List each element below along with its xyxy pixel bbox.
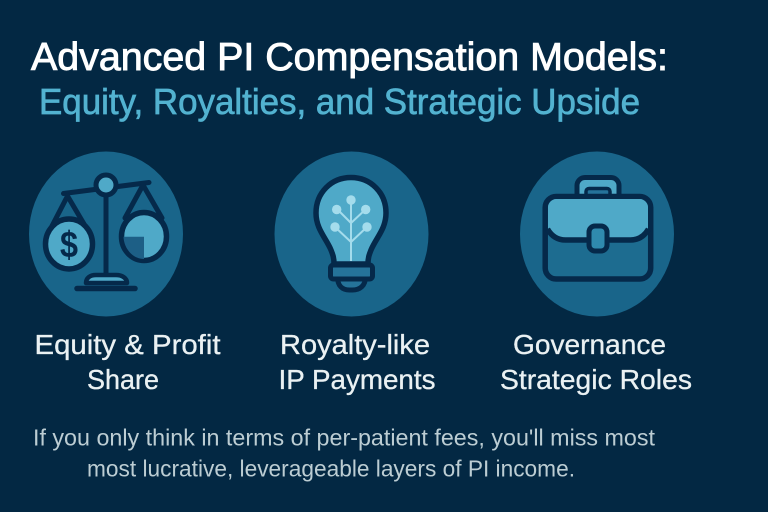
label: equity and profit share: Share [87, 364, 159, 395]
icon: briefcase [520, 152, 674, 316]
label: equity and profit share [34, 329, 221, 395]
icon: balance scale with dollar coin and pie chart: $ [60, 224, 78, 265]
icon: balance scale with dollar coin and pie chart [29, 152, 183, 316]
title: Advanced PI Compensation Models: [31, 36, 668, 79]
closing note: If you only think in terms of per-patient fees, you'll miss most [33, 424, 655, 450]
label: governance strategic roles: Strategic Roles [500, 364, 692, 395]
title [31, 36, 668, 122]
label: equity and profit share: Equity & Profit [34, 329, 221, 360]
label: royalty-like IP payments: IP Payments [278, 364, 436, 395]
icon: light bulb with circuit tree [274, 152, 428, 316]
label: governance strategic roles [500, 329, 692, 395]
label: governance strategic roles: Governance [513, 329, 666, 360]
closing note [33, 424, 655, 482]
label: royalty-like IP payments: Royalty-like [280, 329, 430, 360]
closing note: most lucrative, leverageable layers of PI income. [87, 456, 575, 482]
title: Equity, Royalties, and Strategic Upside [39, 81, 640, 122]
label: royalty-like IP payments [278, 329, 436, 395]
